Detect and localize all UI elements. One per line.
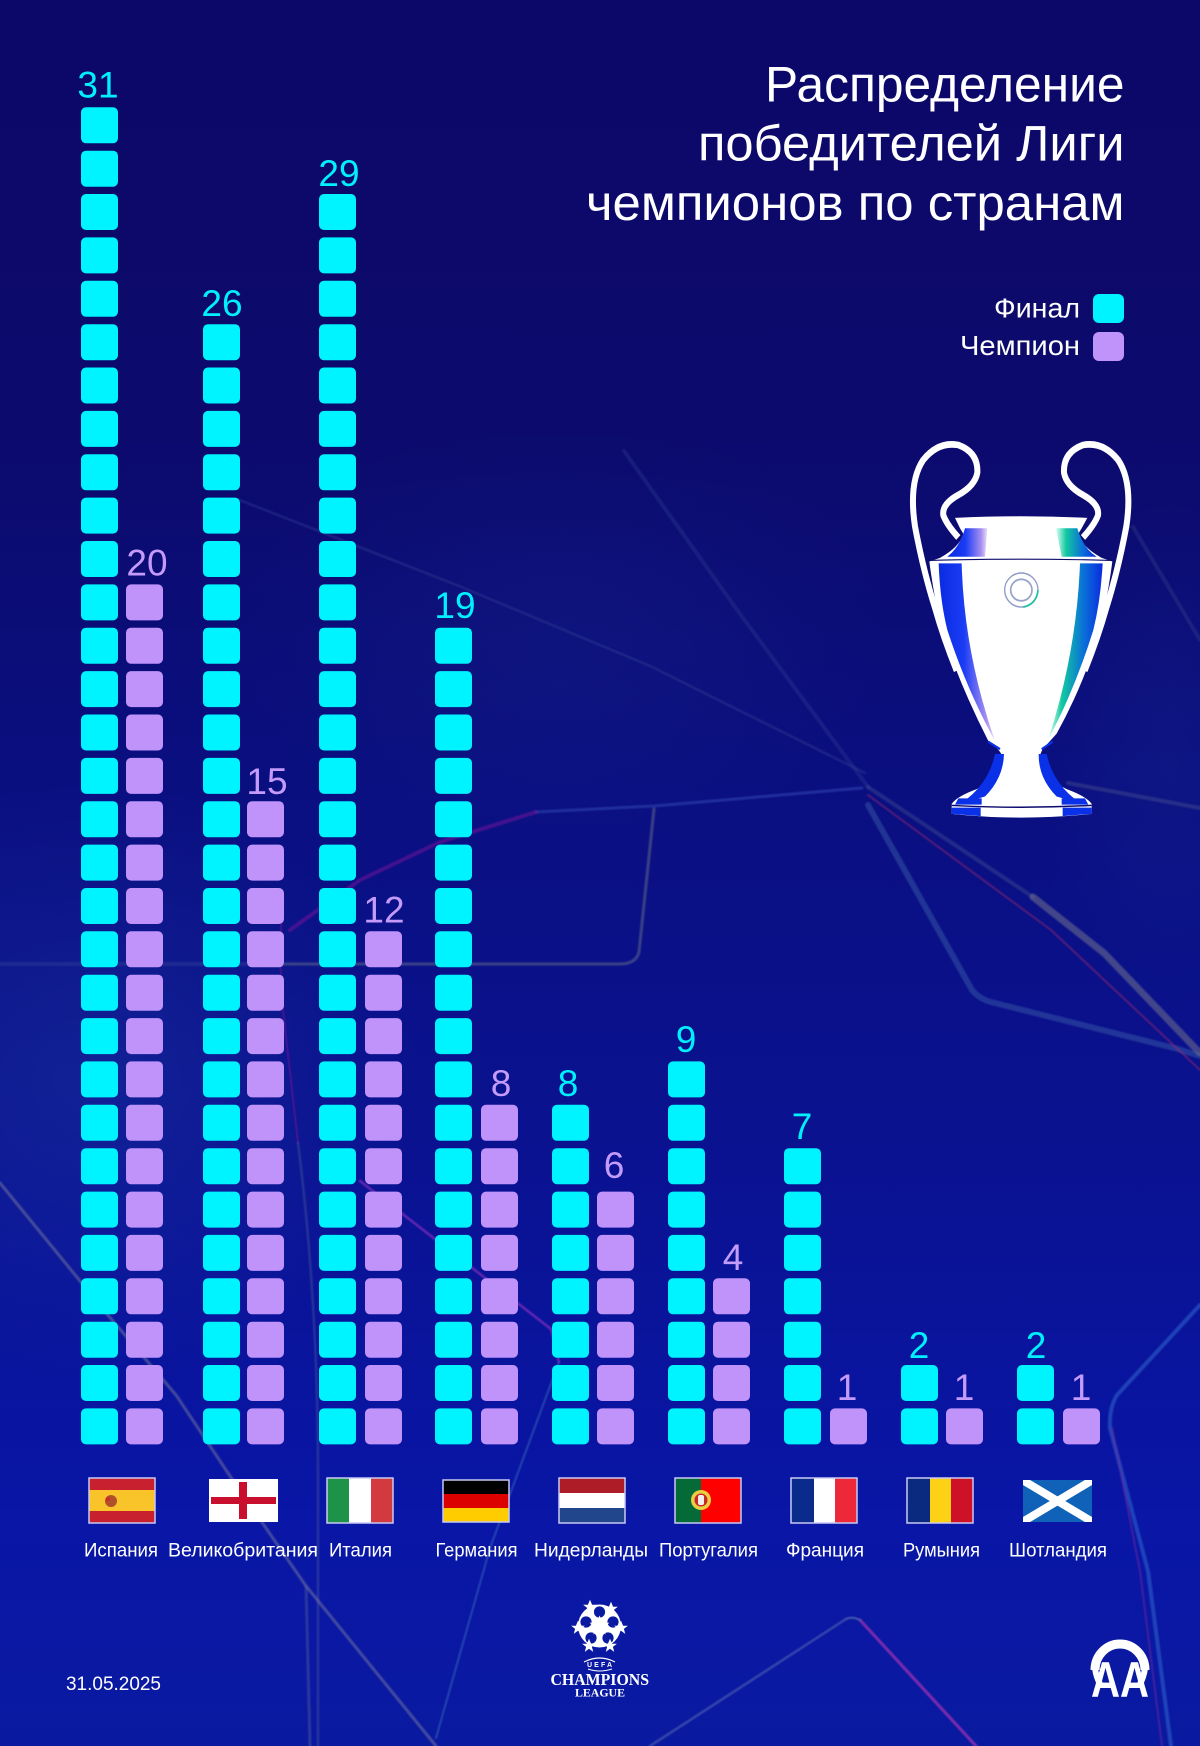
bars: Portugal xyxy=(668,1019,750,1444)
flag: Scotland xyxy=(1023,1480,1092,1522)
bars: Germany: 8 xyxy=(491,1063,511,1104)
bars: Great Britain: 26 xyxy=(201,283,243,324)
logo: UEFA Champions League xyxy=(550,1600,649,1700)
country labels: Великобритания xyxy=(168,1540,318,1562)
bars: Germany: 19 xyxy=(434,585,476,626)
bars: Scotland: 2 xyxy=(1026,1325,1046,1366)
country labels: Германия xyxy=(436,1540,518,1562)
bars: Spain xyxy=(77,64,168,1444)
flag: Italy xyxy=(327,1478,393,1523)
flags xyxy=(89,1478,1096,1524)
date: 31.05.2025 xyxy=(66,1673,161,1695)
country labels: Румыния xyxy=(903,1540,980,1562)
country labels xyxy=(84,1540,1107,1562)
legend: Финал xyxy=(994,292,1080,324)
logo: UEFA Champions League: CHAMPIONS xyxy=(550,1670,649,1689)
flag: Germany xyxy=(443,1480,509,1522)
bars: Great Britain: 15 xyxy=(246,761,288,802)
bars: France: 7 xyxy=(792,1106,812,1147)
flag: Romania xyxy=(907,1478,973,1523)
bars: Scotland: 1 xyxy=(1071,1367,1091,1408)
bars: Spain: 20 xyxy=(126,542,168,584)
bars: France xyxy=(784,1106,867,1444)
logo: UEFA Champions League: LEAGUE xyxy=(575,1686,625,1700)
legend xyxy=(960,292,1124,361)
bars: Italy xyxy=(318,153,405,1444)
country labels: Франция xyxy=(786,1540,864,1562)
bars: Scotland xyxy=(1017,1325,1100,1444)
title: победителей Лиги xyxy=(698,116,1124,172)
legend: Чемпион xyxy=(960,330,1080,361)
flag: Spain xyxy=(89,1478,155,1523)
bars: Portugal: 4 xyxy=(723,1237,743,1278)
flag: Portugal xyxy=(675,1478,741,1523)
bars: Romania: 1 xyxy=(954,1367,974,1408)
icon: champions league trophy xyxy=(913,444,1128,818)
logo: Anadolu Agency: AA xyxy=(1091,1652,1149,1708)
bars: Netherlands: 8 xyxy=(558,1063,578,1104)
bars: Italy: 29 xyxy=(318,153,360,194)
bars: Great Britain xyxy=(201,283,288,1444)
flag: England xyxy=(209,1479,278,1522)
bars: France: 1 xyxy=(837,1367,857,1408)
title: Распределение xyxy=(765,56,1124,112)
logo: UEFA Champions League: UEFA xyxy=(587,1662,612,1669)
bars: Italy: 12 xyxy=(363,890,405,930)
country labels: Португалия xyxy=(659,1540,758,1562)
country labels: Италия xyxy=(329,1540,392,1562)
bars: Romania xyxy=(901,1325,983,1444)
title: чемпионов по странам xyxy=(586,175,1124,231)
icon: starball xyxy=(571,1600,628,1652)
bars: Romania: 2 xyxy=(909,1325,929,1366)
bars: Portugal: 9 xyxy=(676,1019,696,1060)
chart: finals and champions by country xyxy=(77,64,1100,1444)
country labels: Испания xyxy=(84,1540,158,1562)
bars: Netherlands xyxy=(552,1063,634,1444)
flag: Netherlands xyxy=(559,1478,625,1523)
bars: Germany xyxy=(434,585,518,1444)
flag: France xyxy=(791,1478,857,1523)
bars: Spain: 31 xyxy=(77,64,119,106)
country labels: Нидерланды xyxy=(534,1540,648,1562)
bars: Netherlands: 6 xyxy=(604,1145,624,1186)
country labels: Шотландия xyxy=(1009,1540,1107,1562)
title xyxy=(586,56,1124,231)
